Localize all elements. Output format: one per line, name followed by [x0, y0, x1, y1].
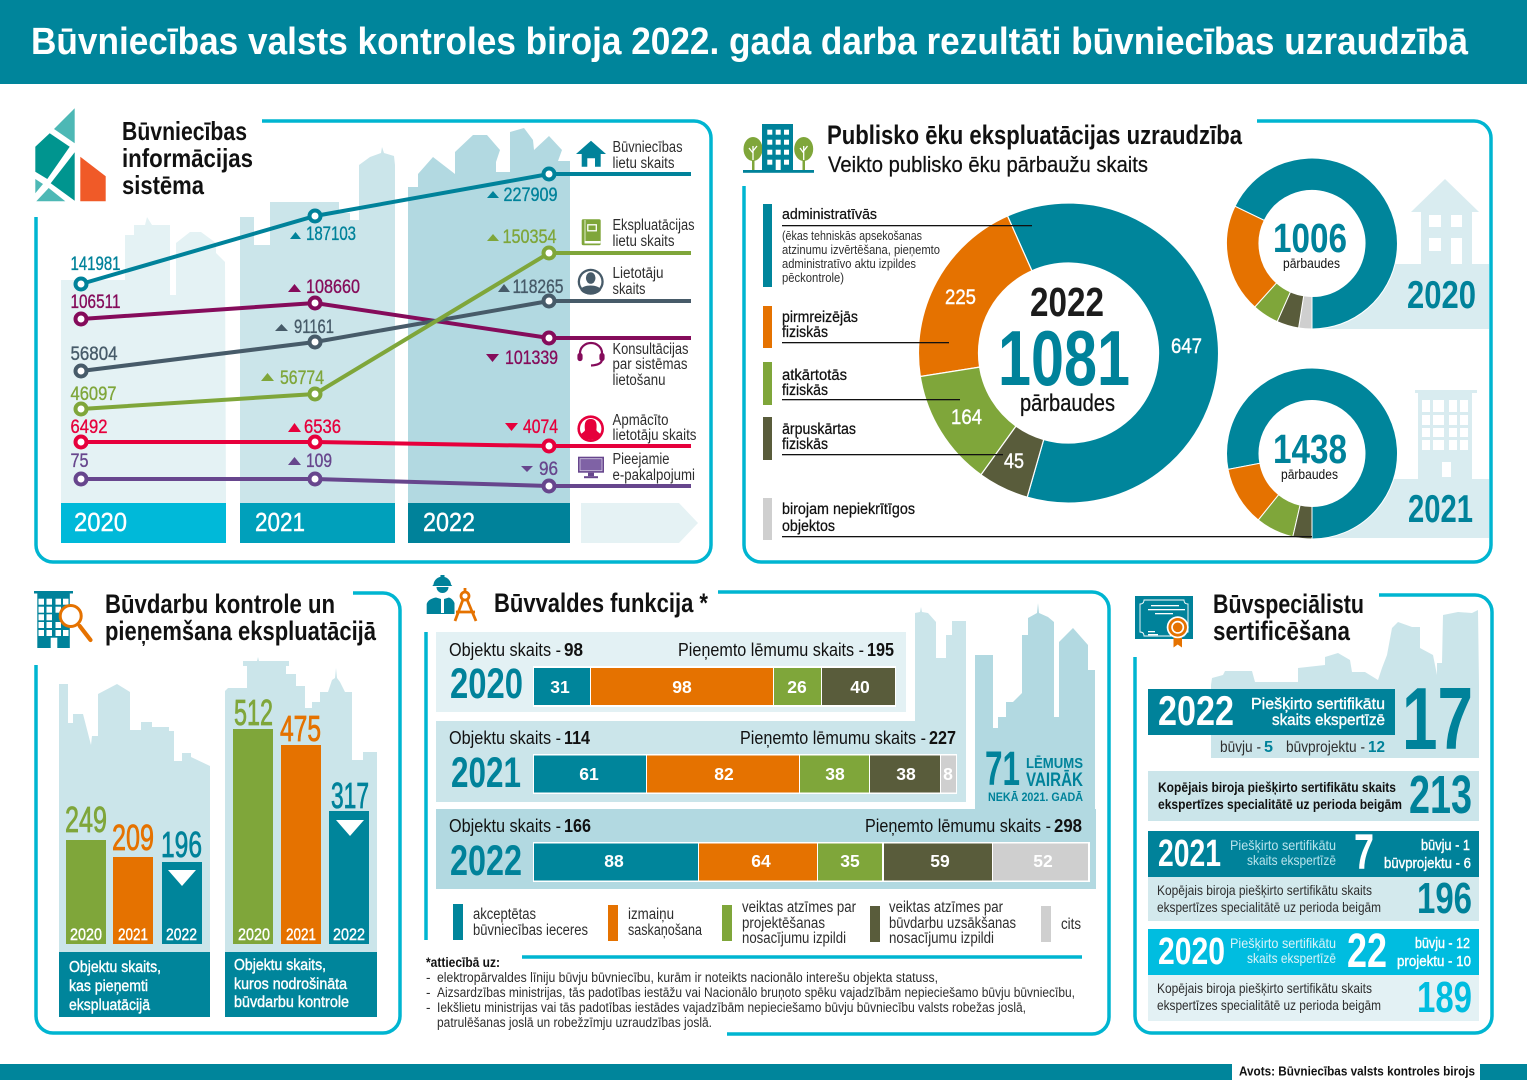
- row 2022: Pieņemto lēmumu skaits -: [865, 816, 1051, 836]
- row 2022: 2022: [450, 837, 522, 885]
- footnote: Aizsardzības ministrijas, tās padotības iestāžu vai Nacionālo bruņoto spēku vajadzībām nepieciešamo būvju būvniecību,: [437, 985, 1075, 1000]
- legend: birojam nepiekrītīgos objektos: [763, 498, 915, 540]
- icon: building with trees: [743, 124, 814, 173]
- year label 2020: 2020: [1407, 274, 1476, 317]
- legend label: Pieejamie e-pakalpojumi: Pieejamie: [612, 451, 670, 468]
- donut 2022 segment values: 225: [945, 286, 976, 309]
- donut 2022 segment values: 647: [1171, 335, 1202, 358]
- card 2022: 5: [1264, 739, 1273, 756]
- legend label: Konsultācijas: Konsultācijas: [612, 341, 689, 358]
- bar chart: objektu skaits, kas pieņemti ekspluatācijā: [59, 684, 210, 1017]
- card 2020: būvju - 12: [1415, 935, 1470, 952]
- card 2021: 7: [1354, 824, 1374, 880]
- series: Pieejamie e-pakalpojumi: [76, 474, 691, 492]
- card 2022: Piešķirto sertifikātu: [1251, 696, 1385, 713]
- row 2021: 2021: [451, 749, 521, 797]
- icon: house: [576, 141, 606, 167]
- footnote: patrulēšanas joslā un robežzīmju uzraudzības joslā.: [437, 1015, 712, 1030]
- legend label: Lietotāju skaits: Lietotāju: [612, 265, 664, 282]
- card 2021: Kopējais biroja piešķirto sertifikātu skaits: [1157, 882, 1372, 898]
- footer band with source: [0, 1064, 1527, 1080]
- chart legend: [576, 139, 697, 484]
- year column 2020: [61, 217, 226, 543]
- icon: book: [582, 219, 601, 245]
- row 2021: 38: [896, 764, 916, 784]
- chart value labels: 106511: [70, 292, 120, 313]
- legend label: Konsultācijas: par sistēmas: [612, 356, 688, 373]
- chart value labels: 109: [306, 451, 332, 472]
- chart value labels: 46097: [70, 384, 116, 405]
- chart value labels: 118265: [512, 277, 564, 298]
- bar chart: objektu skaits, kas pieņemti ekspluatācijā: kas pieņemti: [69, 978, 148, 995]
- legend: ārpuskārtas fiziskās: ārpuskārtas: [782, 421, 856, 438]
- series: Apmācīto lietotāju skaits: [76, 436, 691, 452]
- house silhouette 2020: [1313, 179, 1489, 329]
- card 2021: būvju - 1: [1421, 837, 1470, 854]
- legend: administratīvās: [763, 204, 1032, 287]
- chart value labels: 6536: [304, 417, 341, 438]
- chart value labels: 56804: [70, 344, 118, 365]
- series: Lietotāju skaits: [76, 296, 691, 376]
- icon: monitor: [578, 457, 604, 478]
- row 2022: 35: [840, 851, 860, 871]
- panel heading: [1213, 589, 1364, 646]
- legend label: Lietotāju skaits: skaits: [612, 281, 646, 298]
- card 2020: skaits ekspertīzē: [1247, 950, 1336, 966]
- row 2020: 195: [867, 640, 894, 660]
- donut 2021 centre text: pārbaudes: [1281, 466, 1338, 482]
- logo icon: [35, 108, 106, 201]
- year column 2021: 2021: [255, 507, 305, 537]
- icon: trained user: [577, 415, 604, 442]
- legend label: Būvniecības lietu skaits: lietu skaits: [612, 155, 675, 172]
- row 2021: 8: [943, 764, 953, 784]
- panel: Būvniecības informācijas sistēma: [35, 108, 711, 562]
- card 213 total: Kopējais biroja piešķirto sertifikātu skaits: [1158, 779, 1396, 795]
- year label 2021: 2021: [1408, 488, 1473, 531]
- row 2021: Objektu skaits -: [449, 728, 561, 748]
- chart value labels: 96: [539, 459, 558, 480]
- legend: projektēšanas: [742, 915, 825, 932]
- panel: Būvspeciālistu sertificēšana: [1135, 589, 1492, 1033]
- card 2020: projektu - 10: [1397, 953, 1471, 970]
- panel heading: Būvdarbu kontrole un: [105, 589, 335, 619]
- donut 2020 centre text: [1273, 215, 1347, 271]
- row 2020: 31: [550, 677, 570, 697]
- row 2020: 26: [787, 677, 807, 697]
- card 2020: ekspertīzes specialitātē uz perioda beigām: [1157, 997, 1381, 1013]
- legend label: Konsultācijas: [612, 341, 689, 389]
- card 2021: 2021: [1158, 833, 1221, 875]
- legend label: Lietotāju skaits: [612, 265, 664, 298]
- skyline backdrop 2021: [915, 607, 966, 801]
- donut 2021 centre text: [1273, 426, 1347, 482]
- legend: administratīvās: administratīvo aktu izpildes: [782, 257, 916, 271]
- bar chart: objektu skaits, kuros nodrošināta būvdarbu kontrole: [225, 657, 377, 1017]
- donut 2020: [1227, 158, 1397, 329]
- bar chart: objektu skaits, kuros nodrošināta būvdarbu kontrole: kuros nodrošināta: [234, 976, 347, 993]
- bar chart: objektu skaits, kas pieņemti ekspluatācijā: 249: [65, 799, 107, 840]
- row 2022: 298: [1054, 816, 1082, 836]
- donut legend: [763, 204, 1032, 540]
- card 2020: 22: [1347, 925, 1387, 978]
- bar chart: objektu skaits, kas pieņemti ekspluatācijā: 2020: [70, 925, 102, 944]
- bar chart: objektu skaits, kuros nodrošināta būvdarbu kontrole: 512: [234, 692, 273, 733]
- donut 2022 segment values: 45: [1004, 450, 1024, 473]
- card 2021: skaits ekspertīzē: [1247, 852, 1336, 868]
- bar chart: objektu skaits, kuros nodrošināta būvdarbu kontrole: būvdarbu kontrole: [234, 994, 349, 1011]
- card 2020: 2020: [1158, 931, 1225, 973]
- legend: izmaiņu: [628, 906, 674, 923]
- legend: cits: [1061, 916, 1081, 933]
- footnote: -: [426, 970, 430, 985]
- panel: Būvvaldes funkcija: [426, 575, 1109, 1034]
- row 2022: 88: [604, 851, 624, 871]
- bar chart: objektu skaits, kuros nodrošināta būvdarbu kontrole: 2021: [286, 925, 316, 944]
- donut 2022: [918, 203, 1219, 503]
- legend: pirmreizējās fiziskās: fiziskās: [782, 324, 828, 341]
- donut 2020 centre text: pārbaudes: [1283, 255, 1340, 271]
- bar chart: objektu skaits, kuros nodrošināta būvdarbu kontrole: Objektu skaits,: [234, 957, 326, 974]
- bar chart: objektu skaits, kuros nodrošināta būvdarbu kontrole: 2020: [238, 925, 270, 944]
- legend: pirmreizējās fiziskās: pirmreizējās: [782, 309, 858, 326]
- legend: birojam nepiekrītīgos objektos: birojam nepiekrītīgos: [782, 501, 915, 518]
- skyline backdrop 2022: [975, 603, 1095, 810]
- chart value labels: 6492: [70, 417, 108, 438]
- chart value labels: [70, 185, 564, 480]
- legend: birojam nepiekrītīgos objektos: objektos: [782, 518, 835, 535]
- year column 2020: 2020: [74, 507, 127, 537]
- bar chart: objektu skaits, kas pieņemti ekspluatācijā: ekspluatācijā: [69, 997, 150, 1014]
- donut 2020 centre text: 1006: [1273, 215, 1347, 261]
- legend: administratīvās: atzinumu izvērtēšana, pieņemto: [782, 243, 940, 257]
- legend: administratīvās: (ēkas tehniskās apsekošanas: [782, 229, 922, 243]
- donut 2022 segment values: 164: [951, 406, 982, 429]
- legend: nosacījumu izpildi: [742, 930, 846, 947]
- bar chart: objektu skaits, kas pieņemti ekspluatācijā: 2021: [118, 925, 148, 944]
- donut 2022 centre text: 2022: [1030, 279, 1104, 325]
- card 213 total: 213: [1409, 765, 1472, 825]
- callout: 71 lēmums vairāk: LĒMUMS: [1026, 755, 1083, 772]
- timeline arrow: [581, 503, 698, 543]
- card 213 total: ekspertīzes specialitātē uz perioda beigām: [1158, 796, 1402, 812]
- card 2022: būvprojektu -: [1286, 739, 1365, 756]
- legend label: Būvniecības lietu skaits: [612, 139, 683, 172]
- card 2022: 12: [1368, 739, 1385, 756]
- row 2021: [436, 721, 966, 802]
- row 2020: [436, 632, 906, 712]
- callout: 71 lēmums vairāk: 71: [985, 743, 1020, 796]
- panel: Būvdarbu kontrole un pieņemšana ekspluatācijā: [34, 589, 400, 1033]
- chart value labels: 150354: [502, 227, 557, 248]
- row 2022: 52: [1033, 851, 1053, 871]
- legend label: Ekspluatācijas lietu skaits: Ekspluatācijas: [612, 217, 695, 234]
- chart value labels: 101339: [505, 348, 558, 369]
- card 2021: 196: [1417, 874, 1472, 923]
- donut 2021: [1227, 368, 1398, 539]
- series: Būvniecības lietu skaits: [76, 168, 691, 290]
- card 2021: Piešķirto sertifikātu: [1230, 837, 1336, 853]
- bar chart: objektu skaits, kas pieņemti ekspluatācijā: Objektu skaits,: [69, 959, 161, 976]
- legend: administratīvās: pēckontrole): [782, 271, 844, 285]
- row 2020: 2020: [450, 660, 523, 708]
- row 2021: 227: [929, 728, 956, 748]
- footnote: elektropārvaldes līniju būvju būvniecību, kurām ir noteikts nacionālo interešu objekta statuss,: [437, 970, 938, 985]
- icon: building with magnifier: [34, 591, 90, 648]
- small chart 2020: [1227, 158, 1489, 329]
- icon: headset: [578, 343, 604, 366]
- card 2021: būvprojektu - 6: [1384, 855, 1471, 872]
- skyline backdrop: [1211, 610, 1479, 758]
- panel heading: Būvniecības: [122, 116, 247, 146]
- row 2020: 98: [564, 640, 583, 660]
- footnote: *attiecībā uz:: [426, 955, 500, 970]
- legend label: Apmācīto lietotāju skaits: [612, 412, 697, 444]
- panel heading: sistēma: [122, 170, 204, 200]
- panel heading: Būvspeciālistu: [1213, 589, 1364, 619]
- icon: worker with compass: [427, 575, 476, 621]
- header band: [0, 0, 1527, 84]
- row 2021: 61: [579, 764, 599, 784]
- row 2020: Pieņemto lēmumu skaits -: [678, 640, 864, 660]
- legend label: Apmācīto lietotāju skaits: lietotāju skaits: [612, 427, 697, 444]
- year column 2021: [240, 147, 395, 543]
- panel heading: [122, 116, 253, 200]
- legend: nosacījumu izpildi: [889, 930, 994, 947]
- card 2022: [1148, 669, 1473, 768]
- icon: user: [578, 269, 604, 295]
- callout: 71 lēmums vairāk: [985, 743, 1083, 804]
- chart value labels: 56774: [280, 368, 324, 389]
- icon: certificate: [1135, 596, 1193, 648]
- donut 2022 centre text: pārbaudes: [1020, 390, 1115, 417]
- footnote: -: [426, 985, 430, 1000]
- legend: administratīvās: administratīvās: [782, 206, 877, 223]
- legend: ārpuskārtas fiziskās: fiziskās: [782, 436, 828, 453]
- donut 2022 centre text: 1081: [998, 314, 1130, 402]
- row 2022: Objektu skaits -: [449, 816, 561, 836]
- legend label: Ekspluatācijas lietu skaits: lietu skaits: [612, 233, 675, 250]
- legend label: Pieejamie e-pakalpojumi: e-pakalpojumi: [612, 467, 695, 484]
- legend: [453, 899, 1081, 947]
- legend: atkārtotās fiziskās: [763, 362, 960, 405]
- panel heading: sertificēšana: [1213, 616, 1351, 646]
- chart value labels: 227909: [504, 185, 558, 206]
- legend: saskaņošana: [628, 922, 702, 939]
- footer band with source: Avots: Būvniecības valsts kontroles birojs: [1239, 1064, 1475, 1078]
- row 2022: 64: [751, 851, 771, 871]
- legend: pirmreizējās fiziskās: [763, 306, 949, 348]
- legend label: Būvniecības lietu skaits: Būvniecības: [612, 139, 683, 156]
- legend: atkārtotās fiziskās: fiziskās: [782, 382, 828, 399]
- callout: 71 lēmums vairāk: VAIRĀK: [1026, 770, 1083, 791]
- donut 2022 centre text: [998, 279, 1130, 417]
- legend: atkārtotās fiziskās: atkārtotās: [782, 367, 847, 384]
- legend label: Ekspluatācijas lietu skaits: [612, 217, 695, 250]
- row 2020: 98: [672, 677, 692, 697]
- donut 2021 centre text: 1438: [1273, 426, 1347, 472]
- donut 2022 segment values: [945, 286, 1202, 473]
- card 2020: [1148, 925, 1479, 1022]
- panel: Publisko ēku ekspluatācijas uzraudzība: [743, 120, 1491, 562]
- legend label: Konsultācijas: lietošanu: [612, 372, 666, 389]
- panel heading: Publisko ēku ekspluatācijas uzraudzība: [827, 120, 1243, 150]
- footnote: [426, 955, 1075, 1030]
- chart value labels: 75: [70, 451, 88, 472]
- callout: 71 lēmums vairāk: NEKĀ 2021. GADĀ: [988, 790, 1083, 804]
- bar chart: objektu skaits, kas pieņemti ekspluatācijā: 196: [161, 824, 202, 865]
- row 2020: 40: [850, 677, 870, 697]
- panel heading: Būvvaldes funkcija *: [494, 588, 708, 618]
- panel heading: informācijas: [122, 143, 253, 173]
- card 2020: Piešķirto sertifikātu: [1230, 935, 1336, 951]
- series: Ekspluatācijas lietu skaits: [76, 248, 691, 414]
- card 2021: [1148, 824, 1479, 923]
- series: Konsultācijas: [76, 298, 691, 344]
- row 2020: Objektu skaits -: [449, 640, 561, 660]
- panel subheading: Veikto publisko ēku pārbaužu skaits: [828, 152, 1148, 177]
- panel heading: pieņemšana ekspluatācijā: [105, 616, 377, 646]
- chart value labels: 187103: [306, 224, 356, 245]
- row 2021: 38: [825, 764, 845, 784]
- legend: būvniecības ieceres: [473, 922, 588, 939]
- legend: ārpuskārtas fiziskās: [763, 417, 1003, 460]
- card 2020: Kopējais biroja piešķirto sertifikātu skaits: [1157, 980, 1372, 996]
- card 2022: būvju -: [1220, 739, 1261, 756]
- leader line to birojam nepiekrītīgos: [782, 536, 1312, 537]
- legend: veiktas atzīmes par: [889, 899, 1003, 916]
- row 2022: 59: [930, 851, 950, 871]
- card 2022: skaits ekspertīzē: [1272, 712, 1385, 729]
- row 2021: 82: [714, 764, 734, 784]
- year column 2022: [408, 128, 570, 543]
- chart value labels: 141981: [70, 254, 120, 275]
- card 2021: ekspertīzes specialitātē uz perioda beigām: [1157, 899, 1381, 915]
- card 2022: 17: [1402, 669, 1473, 768]
- row 2022: [436, 809, 1096, 889]
- chart value labels: 91161: [294, 317, 334, 338]
- card 2020: 189: [1417, 973, 1472, 1022]
- row 2022: 166: [564, 816, 591, 836]
- panel heading: [105, 589, 377, 646]
- chart value labels: 108660: [306, 277, 360, 298]
- legend label: Apmācīto lietotāju skaits: Apmācīto: [612, 412, 668, 429]
- card 2022: 2022: [1158, 687, 1234, 734]
- footnote: -: [426, 1000, 430, 1015]
- legend label: Pieejamie e-pakalpojumi: [612, 451, 695, 484]
- row 2021: Pieņemto lēmumu skaits -: [740, 728, 926, 748]
- legend: būvdarbu uzsākšanas: [889, 915, 1016, 932]
- small chart 2021: [1227, 368, 1489, 539]
- footnote: Iekšlietu ministrijas vai tās padotības iestādes vajadzībām nepieciešamo būvju būvniecību valsts robežas joslā,: [437, 1000, 1026, 1015]
- year column 2022: 2022: [423, 507, 475, 537]
- chart value labels: 4074: [523, 417, 558, 438]
- bar chart: objektu skaits, kuros nodrošināta būvdarbu kontrole: 2022: [333, 925, 365, 944]
- bar chart: objektu skaits, kuros nodrošināta būvdarbu kontrole: 317: [331, 775, 369, 816]
- legend: akceptētas: [473, 906, 536, 923]
- bar chart: objektu skaits, kas pieņemti ekspluatācijā: 209: [112, 817, 154, 858]
- bar chart: objektu skaits, kuros nodrošināta būvdarbu kontrole: 475: [280, 708, 321, 749]
- row 2021: 114: [564, 728, 590, 748]
- card 213 total: [1148, 765, 1479, 825]
- building silhouette 2021: [1313, 390, 1489, 538]
- bar chart: objektu skaits, kas pieņemti ekspluatācijā: 2022: [166, 925, 197, 944]
- legend: veiktas atzīmes par: [742, 899, 856, 916]
- line chart: [76, 168, 691, 492]
